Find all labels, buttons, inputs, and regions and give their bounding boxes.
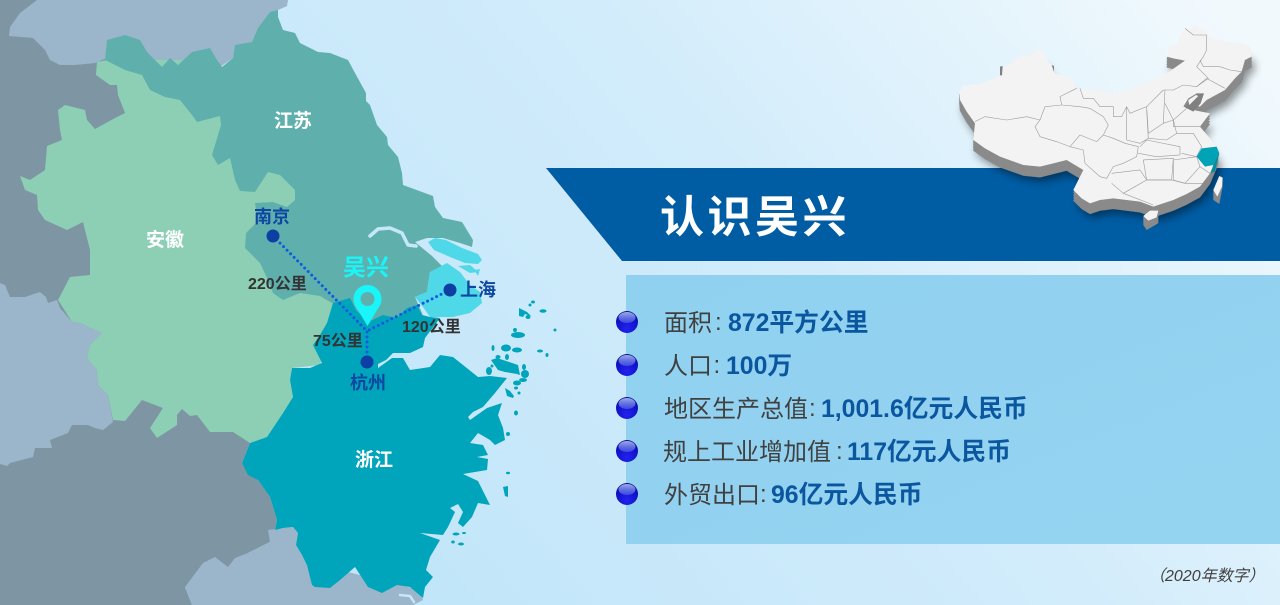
bullet [616,483,638,505]
province borders [975,28,1242,205]
map extrusion [959,28,1252,217]
city marker: Shanghai: 上海 [460,280,496,300]
facts panel [616,275,1280,544]
fact: population: 100万 [726,353,792,380]
label: Jiangsu: 江苏 [274,110,312,132]
Taiwan [1213,177,1223,204]
small estuary islands [458,265,480,276]
distance lines [273,236,450,362]
fact: exports: : [760,481,767,508]
city marker: Nanjing [254,206,290,242]
Yangtze river [370,228,416,246]
fact: population: 人口 [664,353,712,380]
Hainan [1143,212,1158,230]
neighbouring land: north [9,0,288,80]
bullet [616,354,638,376]
fact: exports: 96亿元人民币 [771,481,923,509]
bullet [616,440,638,462]
label: Wuxing: 吴兴 [343,254,389,280]
province: Jiangsu [105,10,473,330]
highlighted Zhejiang [1197,147,1218,167]
Bohai sea and notches [1000,65,1204,112]
label: Zhejiang: 浙江 [355,449,393,471]
map shadow [963,40,1255,222]
Zhoushan islands [451,300,556,546]
fact: area: 面积 [664,310,712,337]
regional map [0,0,556,605]
province: Zhejiang [242,298,507,598]
city marker: Shanghai [444,280,496,300]
fact: industry: 规上工业增加值 [663,439,831,466]
fact: GDP: 1,001.6亿元人民币 [821,395,1028,423]
fact: population [616,352,792,380]
icon: location pin [354,285,382,326]
label: Anhui: 安徽 [146,229,184,251]
fact: area [616,308,869,337]
fact: population: : [714,352,720,379]
province: Shanghai [415,263,482,317]
China map [959,25,1255,230]
fact: GDP: : [809,395,816,422]
neighbouring land: southwest [0,283,113,466]
city marker: Hangzhou [350,356,386,393]
Chongming island [428,238,482,264]
fact: GDP [616,395,1028,423]
fact: exports: 外贸出口 [664,482,760,509]
fact: industry [616,438,1011,466]
province: Anhui [20,60,340,443]
title banner [546,168,1280,261]
fact: exports [616,481,923,509]
city marker: Hangzhou: 杭州 [350,372,386,393]
neighbouring land: dark [0,0,277,605]
fact: area: : [715,309,722,336]
neighbouring land: south [185,527,423,605]
distance label: 220 km: 220公里 [248,276,307,293]
footnote: （2020年数字） [1149,567,1265,585]
city marker: Nanjing: 南京 [254,206,290,227]
bullet [616,311,638,333]
fact: industry: 117亿元人民币 [847,438,1011,466]
fact: area: 872平方公里 [728,308,869,337]
fact: industry: : [836,438,843,465]
title: 认识吴兴 [660,193,850,242]
southern inlet [400,595,414,602]
distance label: 75 km: 75公里 [313,333,363,350]
bullet [616,397,638,419]
distance label: 120 km: 120公里 [402,319,461,336]
fact: GDP: 地区生产总值 [664,396,808,423]
map surface [959,25,1252,207]
